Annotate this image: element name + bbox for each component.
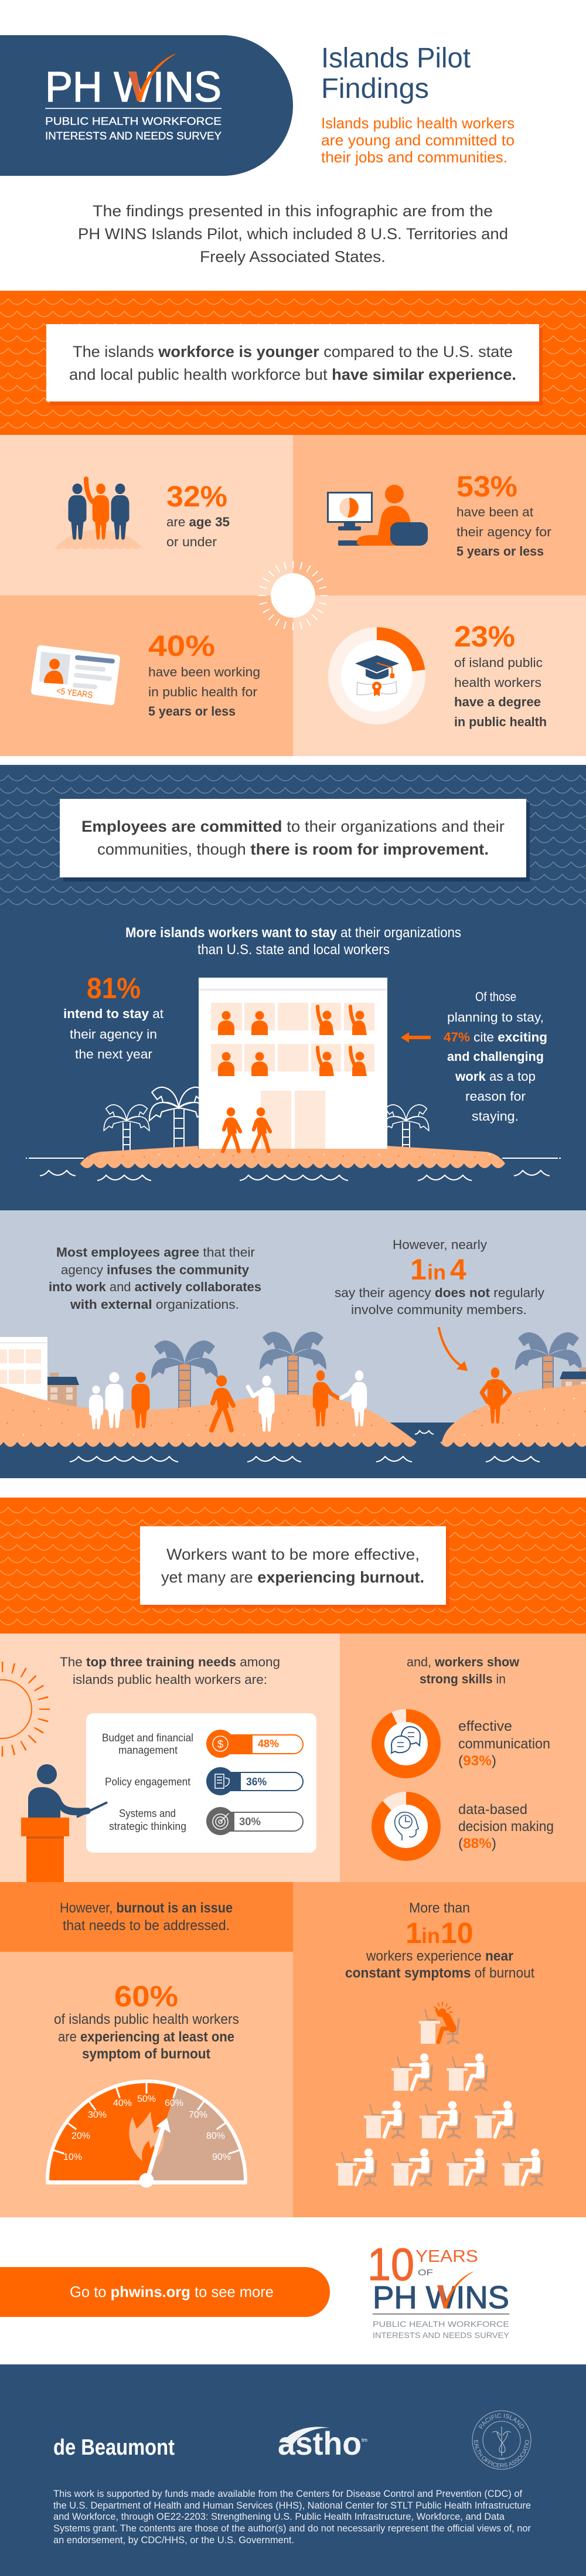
stat: 32% xyxy=(166,480,230,549)
stat: 1 in 4: 4 xyxy=(450,1253,466,1286)
text: community: Most employees agree that their xyxy=(56,1245,255,1260)
donut chart: 93% communication xyxy=(378,1716,434,1772)
text: community: agency infuses the community xyxy=(61,1263,250,1277)
panel: 60% burnout xyxy=(0,1952,293,2217)
card: training bars xyxy=(86,1713,316,1853)
icon: outline sun xyxy=(0,1667,45,1751)
windows row 1 xyxy=(211,1003,374,1071)
stat: 23% xyxy=(454,620,547,729)
stat: 32%: are age 35 xyxy=(166,515,230,529)
panel: orange banner 1: The islands workforce is younger compared to the U.S. state xyxy=(73,343,513,360)
bar: policy 36%: 36% xyxy=(246,1776,267,1788)
gauge labels xyxy=(63,2094,231,2162)
heading: training needs: islands public health workers are: xyxy=(73,1672,267,1687)
header banner with PH WINS logo: PUBLIC HEALTH WORKFORCE xyxy=(45,115,222,127)
gauge labels: 40% xyxy=(113,2098,132,2108)
text: communication: effective xyxy=(458,1719,512,1734)
panel: degree in public health xyxy=(293,595,586,756)
stat: 60%: symptom of burnout xyxy=(82,2046,210,2062)
text: funding disclaimer: Systems grant. The contents are those of the author(s) and do not necessarily represent the official views of, nor xyxy=(53,2523,531,2534)
text: decision making: decision making xyxy=(458,1819,554,1835)
text: funding disclaimer: an endorsement, by CDC/HHS, or the U.S. Government. xyxy=(53,2534,294,2546)
call to action xyxy=(0,2267,330,2317)
gauge labels: 60% xyxy=(165,2098,183,2108)
panel: navy banner xyxy=(0,765,586,1210)
panel: training needs xyxy=(0,1634,340,1882)
bar: policy 36%: Policy engagement xyxy=(105,1776,190,1788)
people walking xyxy=(223,1108,270,1151)
header banner with PH WINS logo xyxy=(0,35,293,176)
panel: orange banner 3: Workers want to be more effective, xyxy=(166,1546,420,1563)
arrow xyxy=(401,1032,431,1043)
stat: 23%: have a degree xyxy=(454,695,541,709)
icon: flame xyxy=(129,2111,163,2161)
panel: strong skills xyxy=(340,1634,586,1882)
icon: presenter at podium xyxy=(21,1764,107,1882)
stat: 47% cite exciting work: and challenging xyxy=(447,1049,544,1064)
subtitle xyxy=(321,114,515,166)
gauge labels: 50% xyxy=(137,2094,156,2104)
bar: budget 48% xyxy=(102,1730,303,1758)
water waves xyxy=(40,1170,550,1180)
icon: sun xyxy=(263,565,323,626)
stat: 53% xyxy=(456,470,551,559)
icon: person at computer xyxy=(328,485,428,546)
heading: stay at organizations: More islands workers want to stay at their organizations xyxy=(125,925,461,941)
stat: 40%: 5 years or less xyxy=(148,704,236,719)
text: community: into work and actively collaborates xyxy=(49,1280,261,1294)
illustration: right island xyxy=(440,1383,586,1447)
heading: strong skills xyxy=(407,1655,520,1686)
heading: training needs xyxy=(60,1655,280,1687)
text: decision making xyxy=(458,1802,554,1852)
gauge labels: 30% xyxy=(88,2110,107,2120)
logo: Pacific Island Health Officers Association seal: PACIFIC ISLAND xyxy=(479,2414,524,2429)
panel: 5 years at agency xyxy=(293,435,586,595)
panel: orange banner 1 xyxy=(0,291,586,435)
stat: 40% xyxy=(148,629,260,719)
stat: 32%: 32% xyxy=(166,480,227,513)
stat: 60% xyxy=(54,1980,239,2062)
gauge needle xyxy=(139,2118,171,2187)
stat: 23%: 23% xyxy=(454,620,515,653)
stat: 81%: intend to stay at xyxy=(63,1006,163,1021)
person walking xyxy=(212,1376,233,1430)
panel: 5 years in public health xyxy=(0,595,293,756)
panel: age 35 or under xyxy=(0,435,293,595)
stat: 47% cite exciting work: 47% cite exciting xyxy=(444,1030,547,1044)
stat: 47% cite exciting work: planning to stay, xyxy=(447,1010,544,1025)
heading: strong skills: strong skills in xyxy=(420,1672,506,1686)
logo: Pacific Island Health Officers Association seal: HEALTH OFFICERS ASSOCIATION xyxy=(473,2440,529,2468)
heading: stay at organizations: than U.S. state and local workers xyxy=(197,942,390,958)
logo: astho: astho xyxy=(278,2425,362,2462)
stat: 47% cite exciting work: Of those xyxy=(475,989,516,1004)
stat: 53%: 53% xyxy=(456,470,517,503)
doors xyxy=(261,1091,325,1149)
stat: 53%: their agency for xyxy=(456,525,551,539)
icon: ID card: <5 YEARS xyxy=(56,686,93,700)
person alone with hands on hips xyxy=(482,1367,510,1424)
icon: desk workers row 2 xyxy=(364,2101,515,2138)
logo: 10 years of PH WINS: PUBLIC HEALTH WORKFORCE xyxy=(373,2319,509,2329)
logo: 10 years of PH WINS: PH WINS xyxy=(373,2280,509,2315)
icon: ID card xyxy=(30,645,121,706)
icon: palm trees outline xyxy=(104,1087,429,1152)
intro text xyxy=(78,202,508,266)
icon: desk workers row 1 xyxy=(391,2054,487,2091)
stat: 40%: in public health for xyxy=(148,685,257,699)
panel: orange banner 3: yet many are experiencing burnout. xyxy=(161,1568,424,1586)
people: family group xyxy=(89,1372,150,1430)
stat: 47% cite exciting work xyxy=(444,989,547,1124)
logo: 10 years of PH WINS: INTERESTS AND NEEDS SURVEY xyxy=(373,2330,510,2340)
subtitle: their jobs and communities. xyxy=(321,148,507,166)
gauge labels: 70% xyxy=(189,2110,207,2120)
panel: navy banner: Employees are committed to their organizations and their xyxy=(81,818,505,835)
logo: 10 years of PH WINS xyxy=(367,2238,510,2340)
bar: systems 30%: strategic thinking xyxy=(109,1820,186,1832)
stat: 1 in 4: in xyxy=(427,1260,446,1284)
intro text: PH WINS Islands Pilot, which included 8 U.S. Territories and xyxy=(78,225,508,243)
stat: 1 in 10: in xyxy=(421,1924,440,1948)
call to action: Go to phwins.org to see more xyxy=(70,2283,274,2301)
stat: 1 in 10: More than xyxy=(409,1900,470,1916)
stat: 47% cite exciting work: staying. xyxy=(472,1109,519,1124)
illustration: house left xyxy=(47,1373,79,1408)
text: funding disclaimer: the U.S. Department of Health and Human Services (HHS), National Center for STLT Public Health Infrastructure xyxy=(53,2500,531,2511)
title: Findings xyxy=(321,73,429,104)
bar: budget 48%: 48% xyxy=(258,1738,279,1750)
donut chart: 23% xyxy=(335,634,419,718)
heading: strong skills: and, workers show xyxy=(407,1655,520,1669)
icon: three people on island xyxy=(54,479,144,550)
stat: 1 in 4: However, nearly xyxy=(393,1237,487,1252)
stat: 81% xyxy=(63,972,163,1061)
subtitle: Islands public health workers xyxy=(321,114,515,132)
text: communication xyxy=(458,1719,550,1769)
panel: community section background xyxy=(0,1210,586,1423)
stat: 23%: health workers xyxy=(454,675,541,690)
panel: orange banner 1: and local public health workforce but have similar experience. xyxy=(69,366,516,383)
subtitle: are young and committed to xyxy=(321,131,515,149)
stat: 53%: 5 years or less xyxy=(456,544,544,559)
illustration: left building xyxy=(0,1337,47,1401)
intro text: Freely Associated States. xyxy=(200,248,386,266)
stat: 32%: or under xyxy=(166,535,217,549)
icon: graduation cap and diploma xyxy=(355,655,399,696)
panel: orange banner 3 xyxy=(0,1498,586,1634)
stat: 1 in 4 xyxy=(335,1237,544,1317)
person waving xyxy=(248,1376,275,1432)
icon: desk workers row 3 xyxy=(336,2149,543,2186)
text: funding disclaimer: This work is supported by funds made available from the Centers for Disease Control and Prevention (CDC) of xyxy=(53,2488,522,2499)
text: community xyxy=(49,1245,261,1312)
gauge labels: 20% xyxy=(71,2131,90,2141)
bar: policy 36% xyxy=(105,1767,303,1795)
text: decision making: (88%) xyxy=(458,1836,496,1852)
chart: burnout gauge xyxy=(46,2081,247,2187)
illustration: building xyxy=(199,978,387,1149)
water xyxy=(0,1423,586,1478)
heading: training needs: The top three training needs among xyxy=(60,1655,280,1669)
people in windows xyxy=(218,1006,367,1076)
arrow: curved to isolated person xyxy=(439,1328,468,1371)
logo: 10 years of PH WINS: YEARS xyxy=(415,2247,478,2266)
stat: 1 in 4: involve community members. xyxy=(351,1302,527,1317)
stat: 81%: their agency in xyxy=(70,1027,157,1042)
stat: 40%: 40% xyxy=(148,629,215,662)
icon: burned out worker xyxy=(419,2002,459,2044)
text: community: with external organizations. xyxy=(70,1297,239,1312)
title: Islands Pilot xyxy=(321,43,471,74)
panel: burnout heading: However, burnout is an issue xyxy=(60,1900,233,1916)
panel: 1 in 10 burnout xyxy=(293,1882,586,2217)
text: communication: (93%) xyxy=(458,1753,496,1769)
header banner with PH WINS logo: PH WINS xyxy=(45,64,222,111)
stat: 60%: of islands public health workers xyxy=(54,2012,239,2027)
text: decision making: data-based xyxy=(458,1802,527,1818)
bar: systems 30% xyxy=(109,1807,303,1835)
donut chart: 88% decision making xyxy=(378,1798,434,1854)
header banner with PH WINS logo: INTERESTS AND NEEDS SURVEY xyxy=(45,130,222,142)
title xyxy=(321,43,471,104)
logo: 10 years of PH WINS: OF xyxy=(418,2268,433,2278)
bar: budget 48%: management xyxy=(118,1744,178,1756)
stat: 23%: in public health xyxy=(454,714,547,729)
gauge labels: 80% xyxy=(206,2131,225,2141)
bar: budget 48%: Budget and financial xyxy=(102,1732,193,1744)
stat: 1 in 10: constant symptoms of burnout xyxy=(345,1965,534,1981)
stat: 1 in 10: workers experience near xyxy=(366,1948,513,1964)
logo: de Beaumont: de Beaumont xyxy=(53,2435,175,2460)
heading: stay at organizations xyxy=(125,925,461,958)
stat: 1 in 4: 1 xyxy=(410,1253,427,1286)
horizon lines xyxy=(26,1158,561,1159)
illustration: house right xyxy=(560,1367,586,1390)
panel: burnout heading: that needs to be addressed. xyxy=(63,1918,230,1934)
illustration: palm trees filled xyxy=(151,1332,582,1413)
bar: budget 48%: $ xyxy=(217,1738,223,1750)
stat: 47% cite exciting work: reason for xyxy=(465,1089,526,1104)
panel: burnout heading xyxy=(0,1882,293,1952)
stat: 53%: have been at xyxy=(456,505,533,519)
gauge labels: 90% xyxy=(212,2152,231,2162)
stat: 81%: 81% xyxy=(87,972,141,1005)
text: communication: communication xyxy=(458,1736,550,1752)
bar: systems 30%: Systems and xyxy=(119,1808,176,1819)
intro text: The findings presented in this infographic are from the xyxy=(93,202,493,220)
text: funding disclaimer: and Workforce, through OE22-2203: Strengthening U.S. Public Health Infrastructure, Workforce, and Data xyxy=(53,2511,505,2522)
illustration: left island xyxy=(0,1386,417,1447)
illustration: island xyxy=(80,1146,505,1168)
stat: 1 in 10: 10 xyxy=(441,1917,473,1949)
panel: navy banner: communities, though there is room for improvement. xyxy=(97,840,489,858)
water waves lower xyxy=(70,1431,540,1462)
stat: 60%: are experiencing at least one xyxy=(58,2029,234,2045)
logo: Pacific Island Health Officers Association seal: 1986 xyxy=(498,2458,505,2461)
stat: 1 in 10 xyxy=(345,1900,534,1981)
stat: 23%: of island public xyxy=(454,655,543,670)
logo: astho: tm xyxy=(362,2437,367,2443)
stat: 47% cite exciting work: work as a top xyxy=(455,1069,536,1084)
gauge labels: 10% xyxy=(63,2152,82,2162)
stat: 40%: have been working xyxy=(148,665,260,679)
text: funding disclaimer xyxy=(53,2488,531,2546)
stat: 60%: 60% xyxy=(114,1980,178,2013)
logo: 10 years of PH WINS: 10 xyxy=(367,2238,414,2290)
bar: systems 30%: 30% xyxy=(239,1816,261,1828)
stat: 1 in 10: 1 xyxy=(406,1917,422,1949)
people shaking hands xyxy=(313,1370,367,1427)
stat: 1 in 4: say their agency does not regularly xyxy=(335,1285,544,1300)
stat: 81%: the next year xyxy=(75,1047,152,1061)
